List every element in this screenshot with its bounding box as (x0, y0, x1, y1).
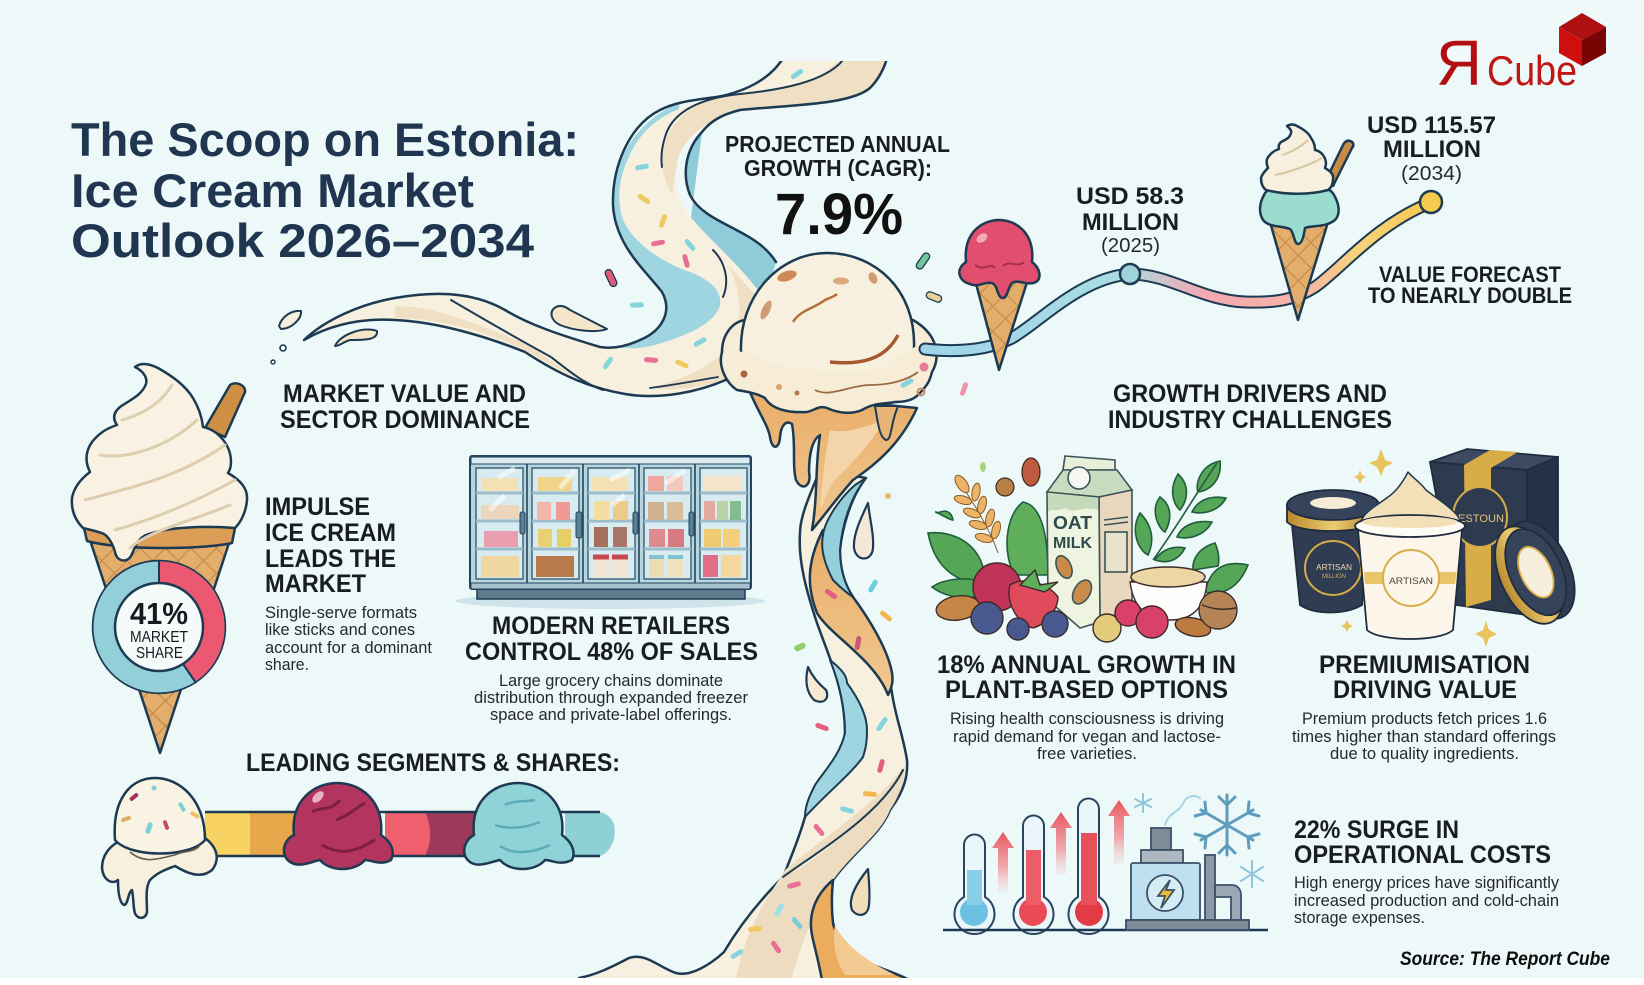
marker 2025 (1120, 264, 1140, 284)
heading: growth drivers and industry challenges: INDUSTRY CHALLENGES (1108, 406, 1392, 434)
icon: pink cone (959, 220, 1039, 370)
icon: premium artisan tubs and box: ARTISAN (1316, 562, 1352, 572)
callout: USD 115.57 million 2034: MILLION (1383, 136, 1481, 163)
oat milk carton (1047, 456, 1132, 628)
gold lid (1481, 511, 1589, 634)
thermometer low (954, 834, 994, 934)
text block: plant-based growth (937, 651, 1236, 763)
swirl: lower ribbon flowing to the bottom edge (579, 470, 930, 985)
logo text: Я (1436, 27, 1482, 99)
title: Outlook 2026–2034 (71, 214, 534, 267)
text block: operational costs (1294, 816, 1559, 927)
left tub (1287, 490, 1380, 612)
callout: value forecast (1368, 262, 1572, 308)
text block: premiumisation: due to quality ingredients. (1330, 744, 1519, 763)
text block: plant-based growth: Rising health consciousness is driving (950, 709, 1224, 728)
title (71, 113, 579, 267)
marker 2034 (1420, 191, 1442, 213)
text block: plant-based growth: 18% ANNUAL GROWTH IN (937, 651, 1236, 679)
ground line (943, 929, 1268, 931)
text block: operational costs: OPERATIONAL COSTS (1294, 841, 1551, 869)
text block: modern retailers: MODERN RETAILERS (492, 612, 730, 640)
text block: operational costs: High energy prices have significantly (1294, 873, 1559, 892)
callout: USD 58.3 million 2025 (1076, 183, 1184, 257)
thermometer medium (1014, 816, 1054, 934)
text block: modern retailers: distribution through expanded freezer (474, 688, 748, 707)
icon: premium artisan tubs and box (1287, 449, 1589, 647)
icon: premium artisan tubs and box: ESTOUN (1458, 513, 1504, 525)
callout: USD 58.3 million 2025: USD 58.3 (1076, 183, 1184, 210)
callout: USD 115.57 million 2034 (1367, 112, 1496, 185)
logo cube (1559, 13, 1606, 66)
icon: central melting ice cream scoop (721, 253, 937, 530)
headline stat: projected CAGR: GROWTH (CAGR): (744, 155, 932, 181)
wafer stick (205, 383, 245, 437)
source note: Source: The Report Cube (1400, 949, 1610, 970)
title: The Scoop on Estonia: (71, 113, 579, 166)
icon: premium artisan tubs and box: MILLION (1322, 574, 1346, 580)
text block: premiumisation (1292, 651, 1556, 763)
text block: plant-based growth: rapid demand for vegan and lactose- (953, 727, 1221, 746)
fruit and nuts (935, 563, 1237, 642)
text block: operational costs: 22% SURGE IN (1294, 816, 1459, 844)
callout: USD 115.57 million 2034: USD 115.57 (1367, 112, 1496, 139)
sprinkles (602, 68, 969, 960)
icon: premium artisan tubs and box: ARTISAN (1389, 576, 1433, 587)
logo: Report Cube (1436, 13, 1606, 99)
text block: premiumisation: PREMIUMISATION (1319, 651, 1530, 679)
text block: operational costs: storage expenses. (1294, 908, 1425, 927)
text block: premiumisation: DRIVING VALUE (1333, 676, 1517, 704)
icon: teal cone with swirl (1260, 124, 1353, 320)
chart: segment share bar with scoops (102, 778, 615, 918)
text block: plant-based growth: PLANT-BASED OPTIONS (945, 676, 1228, 704)
logo: Report Cube: Cube (1487, 47, 1577, 94)
gift box (1430, 449, 1558, 615)
heading: market value and sector dominance (280, 380, 530, 434)
soft-serve swirl (72, 364, 247, 561)
title: Ice Cream Market (71, 164, 474, 217)
text block: impulse ice cream: ICE CREAM (265, 519, 396, 547)
scoop: berry (284, 783, 393, 869)
text block: premiumisation: times higher than standard offerings (1292, 727, 1556, 746)
wheat stalk (952, 473, 1002, 553)
text block: impulse ice cream: like sticks and cones (265, 620, 415, 639)
leaves (928, 461, 1248, 598)
callout: USD 58.3 million 2025: MILLION (1082, 209, 1179, 236)
callout: value forecast: VALUE FORECAST (1379, 262, 1562, 287)
callout: USD 115.57 million 2034: (2034) (1401, 163, 1462, 185)
snowflakes and steam (1135, 794, 1263, 887)
text block: premiumisation: Premium products fetch prices 1.6 (1302, 709, 1547, 728)
thermometer high (1069, 799, 1109, 934)
donut chart 41%: MARKET (130, 629, 188, 646)
text block: impulse ice cream: MARKET (265, 570, 366, 598)
heading: growth drivers and industry challenges (1108, 380, 1392, 434)
icon: plant-based ingredients (928, 456, 1248, 642)
cone (90, 540, 230, 753)
text block: impulse ice cream (265, 493, 432, 674)
text block: impulse ice cream: share. (265, 655, 309, 674)
heading: market value and sector dominance: MARKET VALUE AND (283, 380, 526, 408)
icon: thermometers and cooling unit (943, 794, 1268, 934)
sparkles (1341, 449, 1497, 647)
line chart: value forecast curve (925, 191, 1442, 351)
arrows rising (992, 800, 1130, 892)
headline stat: projected CAGR: PROJECTED ANNUAL (725, 131, 950, 157)
icon: large soft-serve cone with donut chart (72, 364, 247, 753)
donut chart 41%: 41% (130, 596, 188, 631)
icon: plant-based ingredients: OAT (1053, 513, 1092, 533)
text block: modern retailers: CONTROL 48% OF SALES (465, 638, 758, 666)
scoop: vanilla sprinkle (102, 778, 217, 918)
heading: leading segments and shares: LEADING SEGMENTS & SHARES: (246, 749, 620, 777)
donut chart 41%: SHARE (136, 645, 183, 662)
text block: impulse ice cream: LEADS THE (265, 545, 396, 573)
swirl: upper ribbon flowing into the left splash (271, 55, 888, 396)
text block: modern retailers: Large grocery chains dominate (499, 671, 723, 690)
text block: impulse ice cream: IMPULSE (265, 493, 370, 521)
headline stat: projected CAGR (725, 131, 950, 247)
heading: growth drivers and industry challenges: GROWTH DRIVERS AND (1113, 380, 1387, 408)
text block: modern retailers (465, 612, 758, 724)
text block: modern retailers: space and private-label offerings. (490, 705, 732, 724)
text block: impulse ice cream: account for a dominant (265, 638, 432, 657)
text block: operational costs: increased production and cold-chain (1294, 891, 1559, 910)
callout: value forecast: TO NEARLY DOUBLE (1368, 283, 1572, 308)
text block: impulse ice cream: Single-serve formats (265, 603, 417, 622)
scoop: mint blue (464, 783, 574, 869)
icon: plant-based ingredients: MILK (1053, 535, 1092, 552)
center cup (1355, 515, 1465, 639)
headline stat: projected CAGR: 7.9% (775, 182, 903, 247)
icon: supermarket freezer (455, 456, 765, 609)
cooling unit (1126, 828, 1249, 930)
cream swirl (1360, 472, 1461, 527)
donut chart 41% (93, 561, 225, 693)
heading: market value and sector dominance: SECTOR DOMINANCE (280, 406, 530, 434)
text block: plant-based growth: free varieties. (1037, 744, 1137, 763)
callout: USD 58.3 million 2025: (2025) (1101, 235, 1160, 257)
share bar (205, 812, 615, 856)
